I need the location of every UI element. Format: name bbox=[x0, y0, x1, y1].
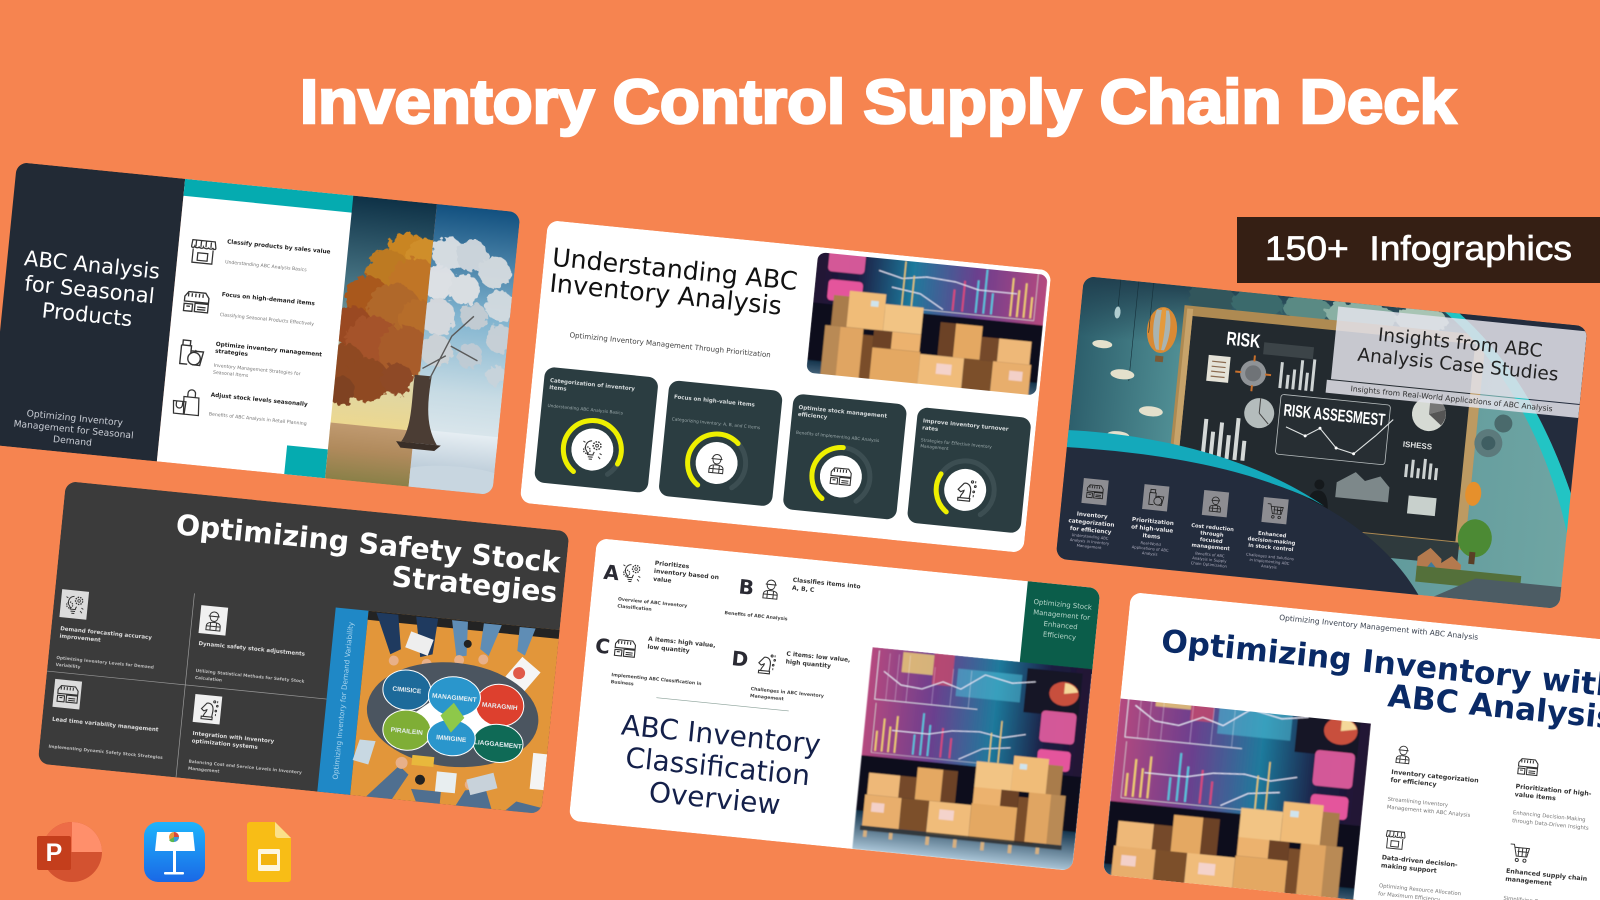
item A: Prioritizes bbox=[654, 560, 690, 570]
cell: dynamic safety stock: Dynamic safety stock adjustments bbox=[198, 641, 306, 658]
item 2: through Data-Driven Insights bbox=[1512, 818, 1589, 832]
dark slide panel bbox=[38, 481, 569, 814]
presenter silhouette bbox=[1308, 480, 1328, 508]
icon: shopping bags bbox=[172, 388, 201, 416]
item: adjust stock bbox=[209, 392, 309, 427]
item 1: Streamlining Inventory bbox=[1387, 797, 1448, 809]
item 1: Management with ABC Analysis bbox=[1386, 805, 1471, 819]
item: optimize strategies bbox=[213, 342, 322, 377]
item C: C bbox=[594, 633, 611, 659]
feature 2: Applications of ABC bbox=[1131, 544, 1169, 553]
warehouse photo bbox=[1099, 678, 1373, 900]
item 4: management bbox=[1505, 876, 1552, 887]
subtitle: Demand bbox=[52, 434, 92, 449]
badge: 150+ Infographics bbox=[1237, 217, 1600, 283]
item: optimize strategies: Inventory Management Strategies for bbox=[213, 364, 301, 377]
balloon bbox=[1146, 307, 1178, 362]
heading: Overview bbox=[647, 776, 782, 822]
green label text: Efficiency bbox=[1043, 630, 1076, 642]
cell: demand forecasting: Optimizing Inventory Levels for Demand bbox=[56, 656, 154, 671]
item 3: Optimizing Resource Allocation bbox=[1379, 883, 1461, 897]
icon: brain gear bbox=[59, 589, 89, 620]
gauge 2 bbox=[685, 432, 748, 490]
risk assessment box bbox=[1275, 394, 1391, 465]
warehouse photo bbox=[852, 647, 1092, 871]
item 1: Inventory categorization bbox=[1391, 769, 1479, 785]
cell: integration: Management bbox=[188, 766, 220, 775]
item 3 bbox=[1378, 830, 1467, 900]
cell: demand forecasting: Variability bbox=[55, 662, 81, 670]
item: optimize strategies: Optimize inventory management bbox=[215, 342, 322, 358]
cell: lead time: Lead time variability management bbox=[52, 717, 159, 733]
item A: A bbox=[602, 560, 621, 585]
team table photo: MANAGIMENT bbox=[432, 693, 477, 704]
item: classify products bbox=[226, 239, 330, 272]
badge: 150+ Infographics: 150+ Infographics bbox=[1265, 230, 1572, 268]
cell: lead time: Implementing Dynamic Safety Stock Strategies bbox=[48, 744, 163, 761]
subtitle bar bbox=[1326, 380, 1580, 418]
slide: Optimizing Safety Stock Strategies bbox=[38, 481, 569, 814]
slide: Optimizing Inventory with ABC Analysis bbox=[1099, 592, 1600, 900]
card 1: items bbox=[549, 385, 567, 393]
feature 2: of high-value bbox=[1131, 524, 1174, 535]
warehouse photo bbox=[806, 252, 1048, 395]
white slide panel bbox=[520, 220, 1051, 553]
item A: Classification bbox=[617, 603, 652, 613]
item C: Business bbox=[610, 679, 634, 687]
card 2: Categorizing Inventory: A, B, and C Items bbox=[671, 416, 761, 431]
item: adjust stock: Benefits of ABC Analysis in Retail Planning bbox=[209, 411, 307, 427]
card 4: Management bbox=[920, 443, 949, 452]
item B: A, B, C bbox=[792, 585, 815, 594]
card 3: efficiency bbox=[798, 412, 828, 421]
feature 4: Challenges and Solutions bbox=[1246, 552, 1294, 561]
left navy panel bbox=[0, 162, 185, 461]
icon: Google Slides bbox=[247, 822, 291, 882]
icon: PowerPoint: P bbox=[46, 839, 62, 867]
cell: demand forecasting: Demand forecasting accuracy bbox=[60, 626, 152, 641]
item C bbox=[592, 630, 716, 695]
teal curve bbox=[1421, 310, 1590, 540]
feature 3: management bbox=[1191, 543, 1231, 552]
feature 4: Enhanced bbox=[1258, 531, 1287, 539]
icon: Keynote bbox=[144, 822, 205, 882]
card 4 bbox=[906, 407, 1032, 536]
team table photo: LIAGGAEMENT bbox=[474, 739, 522, 751]
card 1: Categorization of inventory bbox=[550, 378, 635, 392]
icon: knight bbox=[193, 694, 222, 725]
team table photo: CIMISICE bbox=[392, 686, 422, 695]
item 2: Prioritization of high- bbox=[1515, 783, 1592, 798]
title: Inventory Control Supply Chain Deck bbox=[300, 68, 1457, 137]
white slide panel bbox=[569, 538, 1100, 871]
feature 2: items bbox=[1142, 533, 1161, 541]
heading: Understanding ABC bbox=[551, 243, 799, 296]
item 4: Enhanced supply chain bbox=[1506, 868, 1587, 883]
icon: machine bbox=[183, 291, 209, 313]
cell: lead time bbox=[48, 717, 166, 761]
gauge 4 bbox=[934, 458, 996, 517]
item 2: value items bbox=[1514, 791, 1556, 802]
gauge 3 bbox=[809, 445, 872, 504]
cell: dynamic safety stock: Utilizing Statistical Methods for Safety Stock bbox=[195, 669, 304, 685]
cell: dynamic safety stock bbox=[195, 641, 307, 692]
item D: C items: low value, bbox=[786, 650, 851, 664]
teal wave bbox=[1062, 429, 1329, 506]
heading: Inventory Analysis bbox=[548, 269, 783, 321]
heading: Classification bbox=[624, 741, 812, 792]
feature 2 bbox=[1128, 483, 1178, 558]
feature 1: for efficiency bbox=[1070, 526, 1112, 536]
feature 2: Analysis bbox=[1142, 550, 1158, 557]
green label text: Optimizing Stock bbox=[1033, 598, 1092, 612]
card 4: Improve inventory turnover bbox=[922, 418, 1009, 433]
feature 1 bbox=[1066, 477, 1119, 551]
item: focus on high-demand: Focus on high-demand items bbox=[221, 292, 316, 307]
green label text: Management for bbox=[1033, 608, 1091, 622]
feature 4: Analysis bbox=[1261, 563, 1277, 570]
frame and board bbox=[1163, 305, 1486, 550]
card 1: Understanding ABC Analysis Basics bbox=[547, 403, 624, 416]
feature 1: Analysis in Inventory bbox=[1070, 537, 1110, 546]
item 3: making support bbox=[1381, 862, 1437, 875]
card 4: Strategies for Effective Inventory bbox=[921, 438, 992, 450]
cell: demand forecasting: improvement bbox=[59, 634, 101, 644]
item A: Overview of ABC Inventory bbox=[618, 597, 687, 609]
cell: integration: Integration with inventory bbox=[192, 731, 274, 745]
item D: Challenges in ABC Inventory bbox=[750, 687, 824, 699]
item 2 bbox=[1512, 758, 1595, 832]
item 2: Enhancing Decision-Making bbox=[1513, 810, 1586, 823]
feature 3: focused bbox=[1200, 537, 1223, 545]
feature 2: Prioritization bbox=[1132, 517, 1174, 527]
tree photo: autumn and winter bbox=[313, 194, 526, 496]
subtitle: Optimizing Inventory bbox=[26, 408, 123, 429]
item A: inventory based on bbox=[654, 568, 719, 581]
item: optimize strategies: strategies bbox=[215, 349, 249, 358]
feature 4: decision-making bbox=[1247, 536, 1296, 547]
clouds bbox=[1092, 340, 1163, 436]
cell: integration: Balancing Cost and Service Levels in Inventory bbox=[188, 760, 302, 776]
item D: Management bbox=[750, 693, 785, 702]
gauge 1 bbox=[560, 418, 624, 477]
team table photo: MARAGNIH bbox=[482, 702, 518, 712]
item: focus on high-demand: Classifying Seasonal Products Effectively bbox=[219, 312, 315, 327]
feature 3 bbox=[1187, 489, 1238, 569]
heading: Strategies bbox=[390, 560, 559, 609]
item D: high quantity bbox=[785, 658, 831, 670]
feature 3: through bbox=[1200, 530, 1224, 539]
grid lines bbox=[38, 580, 336, 792]
navy base bbox=[1054, 446, 1431, 597]
team table photo: PIRAILEIN bbox=[390, 727, 423, 737]
heading: ABC Analysis for Seasonal Products: Products bbox=[41, 298, 133, 331]
card 2: Focus on high-value items bbox=[674, 394, 756, 409]
slide: ABC Analysis for Seasonal Products bbox=[0, 162, 526, 496]
feature 3: Benefits of ABC bbox=[1195, 550, 1225, 558]
icon: groceries bbox=[180, 340, 204, 366]
item 1 bbox=[1386, 745, 1481, 819]
green label text: Enhanced bbox=[1043, 620, 1078, 631]
subtitle: Management for Seasonal bbox=[13, 418, 134, 441]
subtitle: Insights from Real-World Applications of ABC Analysis bbox=[1350, 384, 1553, 413]
team table photo bbox=[349, 611, 560, 814]
white content panel bbox=[157, 179, 354, 478]
card 1 bbox=[534, 366, 659, 496]
blackboard illustration: RISK bbox=[1225, 329, 1262, 353]
icon: PowerPoint bbox=[37, 822, 102, 882]
cell: dynamic safety stock: Calculation bbox=[195, 675, 222, 684]
subtitle: Optimizing Inventory Management with ABC Analysis bbox=[1279, 613, 1479, 642]
item C: low quantity bbox=[647, 644, 690, 655]
blackboard illustration: RISK ASSESMEST bbox=[1283, 401, 1386, 430]
item B: Classifies items into bbox=[792, 577, 861, 590]
feature 1: Management bbox=[1076, 543, 1102, 550]
teal top bar bbox=[183, 179, 354, 213]
icon: store bbox=[190, 240, 217, 264]
green label box bbox=[1019, 581, 1100, 674]
icon: worker bbox=[199, 605, 228, 636]
slide: Understanding ABC Inventory Analysis bbox=[520, 221, 1050, 552]
slide: Insights from ABC Analysis Case Studies bbox=[1054, 272, 1590, 611]
icon: machine bbox=[52, 679, 82, 709]
feature 1: Inventory bbox=[1076, 511, 1108, 521]
item 4 bbox=[1503, 844, 1590, 900]
teal bottom square bbox=[284, 445, 328, 478]
card 3: Optimize stock management bbox=[798, 405, 887, 420]
heading: Optimizing Safety Stock bbox=[174, 508, 562, 580]
feature 4 bbox=[1245, 496, 1300, 571]
feature 4: in Implementing ABC bbox=[1249, 557, 1290, 566]
card 2 bbox=[658, 380, 783, 509]
decorative gears above frame bbox=[1188, 286, 1449, 330]
divider bbox=[656, 698, 789, 711]
item: optimize strategies: Seasonal Items bbox=[213, 370, 249, 379]
feature 3: Chain Optimization bbox=[1191, 560, 1228, 569]
title panel bbox=[1331, 306, 1587, 404]
wooden frame right edge highlight bbox=[1455, 347, 1480, 546]
white slide panel bbox=[1103, 592, 1600, 900]
feature 4: in stock control bbox=[1248, 543, 1294, 553]
heading: Analysis Case Studies bbox=[1356, 345, 1559, 386]
vertical label: Optimizing Inventory for Demand Variability bbox=[331, 621, 355, 780]
card 3: Benefits of Implementing ABC Analysis bbox=[796, 430, 880, 444]
item: adjust stock: Adjust stock levels seasonally bbox=[210, 392, 308, 408]
blackboard illustration bbox=[1054, 272, 1590, 611]
item D: D bbox=[731, 646, 749, 672]
subtitle: Optimizing Inventory Management Through Prioritization bbox=[569, 330, 771, 359]
blackboard illustration: ISHESS bbox=[1402, 440, 1433, 452]
item A: value bbox=[653, 576, 672, 585]
feature 1: Understanding ABC bbox=[1071, 532, 1109, 541]
item B bbox=[724, 570, 861, 629]
feature 3: Cost reduction bbox=[1191, 523, 1234, 533]
item: focus on high-demand bbox=[219, 292, 317, 327]
item B: Benefits of ABC Analysis bbox=[724, 610, 788, 622]
item 3: Data-driven decision- bbox=[1381, 854, 1458, 869]
heading: ABC Inventory bbox=[620, 708, 822, 761]
item: classify products: Classify products by sales value bbox=[227, 239, 331, 256]
feature 3: Analysis in Supply bbox=[1192, 555, 1228, 564]
cell: integration: optimization systems bbox=[191, 738, 259, 751]
heading: ABC Analysis for Seasonal Products: ABC Analysis bbox=[23, 246, 161, 284]
blue side bar bbox=[317, 608, 369, 795]
team table photo: IMMIGINE bbox=[436, 734, 467, 744]
right side decoration bbox=[1364, 414, 1562, 608]
slide: ABC Inventory Classification Overview bbox=[569, 538, 1101, 871]
feature 2: Real-World bbox=[1140, 540, 1161, 547]
cell: integration bbox=[188, 731, 305, 783]
feature 1: categorization bbox=[1068, 518, 1115, 529]
item C: Implementing ABC Classification in bbox=[611, 673, 702, 687]
card 3 bbox=[782, 393, 907, 523]
item: classify products: Understanding ABC Analysis Basics bbox=[225, 259, 307, 273]
card 4: rates bbox=[922, 425, 939, 433]
cell: demand forecasting bbox=[55, 626, 157, 678]
heading: Insights from ABC bbox=[1377, 325, 1543, 362]
heading: ABC Analysis for Seasonal Products: for Seasonal bbox=[24, 271, 156, 308]
item D bbox=[728, 645, 851, 709]
item A bbox=[600, 555, 720, 619]
item 1: for efficiency bbox=[1390, 777, 1437, 788]
navy top right corner bbox=[1440, 311, 1590, 498]
item B: B bbox=[738, 574, 755, 600]
item C: A items: high value, bbox=[648, 636, 716, 649]
